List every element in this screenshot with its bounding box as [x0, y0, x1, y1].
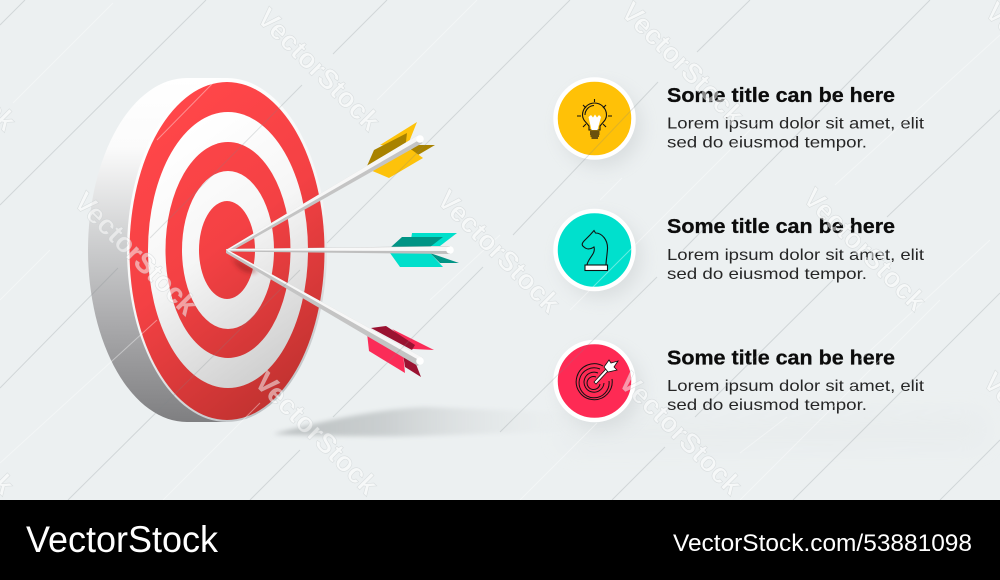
item 3: goal	[556, 342, 925, 429]
item 1: idea	[556, 80, 925, 167]
description 2: Lorem ipsum dolor sit amet, elit	[667, 247, 925, 264]
badge: pink circle	[556, 342, 634, 420]
arrow: yellow	[226, 122, 435, 253]
footer url: VectorStock.com/53881098	[673, 530, 972, 557]
circle shadow	[561, 349, 641, 429]
outer red ring	[130, 82, 324, 420]
footer bar	[0, 500, 1000, 580]
title 1: Some title can be here	[667, 84, 895, 107]
description 1: Lorem ipsum dolor sit amet, elit	[667, 116, 925, 132]
badge: teal circle	[556, 211, 634, 289]
watermarks: VectorStock	[68, 186, 203, 321]
watermarks: VectorStock	[613, 366, 748, 501]
icon: chess knight	[582, 230, 608, 270]
title 3: Some title can be here	[667, 346, 895, 370]
description 3: Lorem ipsum dolor sit amet, elit	[667, 378, 925, 395]
arrow contact shadow	[232, 258, 258, 273]
watermarks: VectorStock	[249, 366, 384, 501]
arrow: red	[226, 249, 434, 377]
bullseye	[199, 201, 255, 299]
description 2: sed do eiusmod tempor.	[667, 266, 867, 283]
target side wall	[88, 78, 226, 422]
target rim	[127, 78, 327, 422]
arrow: teal	[226, 233, 459, 267]
description 1: sed do eiusmod tempor.	[667, 134, 867, 152]
watermarks: VectorStock	[431, 184, 566, 319]
target board	[88, 78, 327, 422]
item 2: strategy	[556, 211, 925, 298]
badge: yellow circle	[556, 80, 634, 158]
floor shadow of target	[273, 407, 985, 450]
icon: light bulb	[577, 99, 612, 138]
inner white ring	[182, 171, 274, 329]
title 2: Some title can be here	[667, 215, 895, 238]
outer white ring	[148, 112, 308, 388]
circle shadow	[561, 87, 641, 167]
watermarks: VectorStock	[797, 182, 932, 317]
icon: target with dart	[576, 360, 618, 400]
description 3: sed do eiusmod tempor.	[667, 397, 867, 414]
inner red ring	[166, 142, 290, 358]
watermarks: VectorStock	[251, 2, 386, 137]
circle shadow	[561, 218, 641, 298]
footer logo: VectorStock	[26, 519, 218, 560]
